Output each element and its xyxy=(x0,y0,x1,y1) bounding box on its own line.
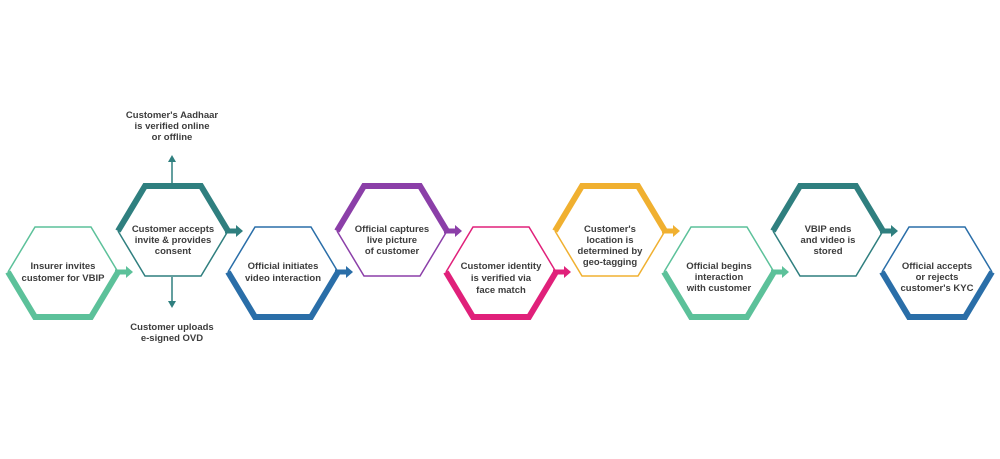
hex 3: official initiates: Official initiates xyxy=(248,261,318,272)
hex 4: live picture: live picture xyxy=(367,235,417,246)
callout: aadhaar: Customer's Aadhaar xyxy=(126,110,218,121)
hex 2: customer accepts: invite & provides xyxy=(135,235,211,246)
hex 8: vbip ends: stored xyxy=(813,246,843,257)
hex 4: live picture xyxy=(337,186,462,276)
callout: uploads OVD: e-signed OVD xyxy=(141,333,203,344)
hex 3: official initiates xyxy=(228,227,353,317)
hex 8: vbip ends: VBIP ends xyxy=(805,224,851,235)
hex 5: face match: is verified via xyxy=(471,273,532,284)
hex 7: official begins: Official begins xyxy=(686,261,752,272)
hex 8: vbip ends: and video is xyxy=(801,235,855,246)
hex 9: accepts or rejects: or rejects xyxy=(916,272,958,283)
hex 7: official begins xyxy=(664,227,789,317)
hex 1: insurer invites: customer for VBIP xyxy=(22,273,105,284)
hex 1: insurer invites xyxy=(8,227,133,317)
hex 6: geo-tagging: determined by xyxy=(578,246,643,257)
hex 6: geo-tagging: Customer's xyxy=(584,224,636,235)
hex 5: face match xyxy=(446,227,571,317)
hex 2: customer accepts: consent xyxy=(155,246,192,257)
hex 8: vbip ends xyxy=(773,186,898,276)
callout: uploads OVD xyxy=(130,322,214,344)
hex 5: face match: Customer identity xyxy=(461,261,542,272)
hex 3: official initiates: video interaction xyxy=(245,273,321,284)
callout: aadhaar: is verified online xyxy=(135,121,209,132)
hex 2: customer accepts xyxy=(118,155,243,308)
callout: aadhaar xyxy=(126,110,218,143)
hex 7: official begins: with customer xyxy=(686,283,751,294)
hex 4: live picture: of customer xyxy=(365,246,419,257)
callout: uploads OVD: Customer uploads xyxy=(130,322,214,333)
hex 2: customer accepts: Customer accepts xyxy=(132,224,214,235)
hex 9: accepts or rejects: Official accepts xyxy=(902,261,972,272)
hex 6: geo-tagging: geo-tagging xyxy=(583,257,637,268)
hex 6: geo-tagging xyxy=(555,186,680,276)
hex 5: face match: face match xyxy=(476,285,526,296)
hex 1: insurer invites: Insurer invites xyxy=(31,261,95,272)
hex 6: geo-tagging: location is xyxy=(587,235,633,246)
hex 9: accepts or rejects: customer's KYC xyxy=(900,283,974,294)
hex 7: official begins: interaction xyxy=(695,272,743,283)
hex 9: accepts or rejects xyxy=(882,227,992,317)
callout: aadhaar: or offline xyxy=(152,132,192,143)
hex 4: live picture: Official captures xyxy=(355,224,429,235)
